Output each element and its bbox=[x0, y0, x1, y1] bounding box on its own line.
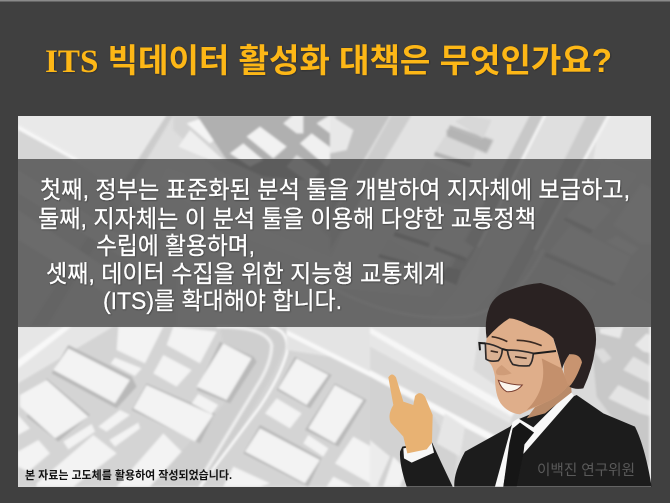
body text: second item continued: 수립에 활용하며, bbox=[96, 233, 255, 260]
face bbox=[485, 317, 568, 414]
jacket bbox=[454, 395, 652, 487]
body text: first item: 첫째, 정부는 표준화된 분석 툴을 개발하여 지자체에 보급하고, bbox=[40, 177, 630, 204]
hair bbox=[486, 283, 596, 389]
person: researcher portrait bbox=[388, 283, 652, 487]
shirt cuff bbox=[403, 443, 434, 463]
hand bbox=[388, 374, 433, 453]
sleeve bbox=[400, 442, 453, 487]
body text: second item: 둘째, 지자체는 이 분석 툴을 이용해 다양한 교통정책 bbox=[38, 206, 536, 233]
neck and jaw shadow bbox=[527, 375, 572, 418]
nose bbox=[496, 365, 512, 375]
upper left area bbox=[18, 116, 331, 184]
head bbox=[479, 283, 596, 418]
lower right roads behind person bbox=[370, 327, 652, 487]
panel: city background bbox=[18, 115, 653, 487]
title: ITS 빅데이터 활성화 대책은 무엇인가요? bbox=[45, 42, 612, 80]
shirt bbox=[495, 391, 574, 487]
cheek shading bbox=[527, 358, 568, 410]
brows and eyes bbox=[491, 337, 542, 358]
lower left city bbox=[18, 327, 385, 487]
body and hand bbox=[388, 374, 652, 487]
ear bbox=[564, 353, 582, 385]
panel: dark translucent text band bbox=[18, 159, 651, 327]
upper right area bbox=[328, 116, 651, 284]
body text: third item continued: (ITS)를 확대해야 합니다. bbox=[103, 288, 342, 315]
mouth bbox=[498, 380, 522, 392]
researcher name: 이백진 연구위원 bbox=[537, 462, 635, 479]
glasses temple bbox=[479, 343, 556, 354]
footnote: 본 자료는 고도체를 활용하여 작성되었습니다. bbox=[25, 468, 232, 482]
glasses bbox=[485, 343, 533, 366]
tie bbox=[503, 423, 534, 487]
body text: third item: 셋째, 데이터 수집을 위한 지능형 교통체계 bbox=[46, 261, 445, 288]
